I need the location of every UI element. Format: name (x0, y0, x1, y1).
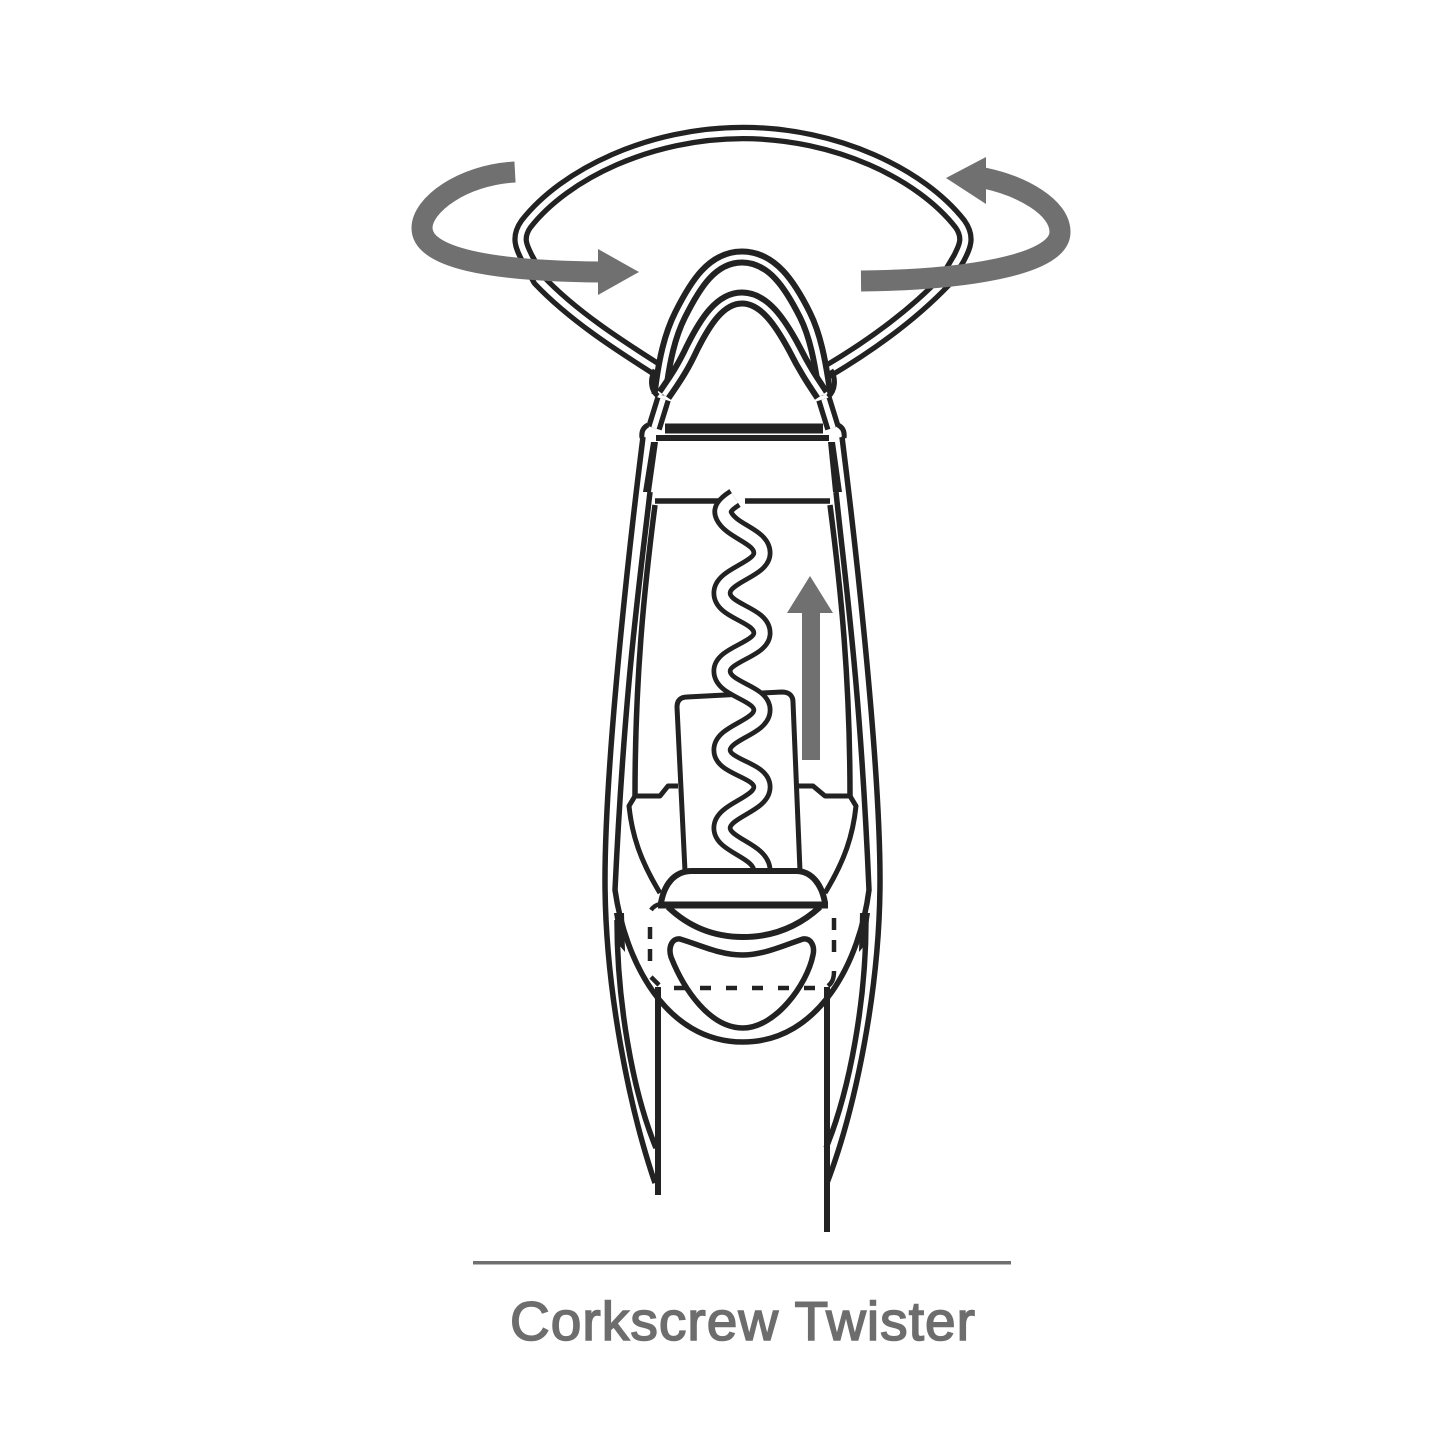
dashed cutout outline (650, 904, 834, 988)
title: Corkscrew Twister (510, 1290, 975, 1352)
body shell (605, 437, 880, 1183)
cork (677, 692, 800, 871)
arrow: left rotation (422, 172, 639, 295)
top handle (521, 133, 965, 372)
inner shell wedges (614, 442, 870, 952)
corkscrew spiral (722, 498, 762, 871)
crossbars (642, 425, 844, 438)
divider line (473, 1261, 1011, 1264)
arrow: upward pull (787, 576, 833, 760)
cork plate (658, 871, 828, 937)
base flanges (629, 786, 856, 893)
bottle neck lines (658, 987, 827, 1232)
icon: corkscrew illustration (521, 133, 965, 1232)
finger hole (670, 939, 814, 1028)
neck caps (652, 257, 834, 428)
arrow: right rotation (861, 157, 1060, 281)
